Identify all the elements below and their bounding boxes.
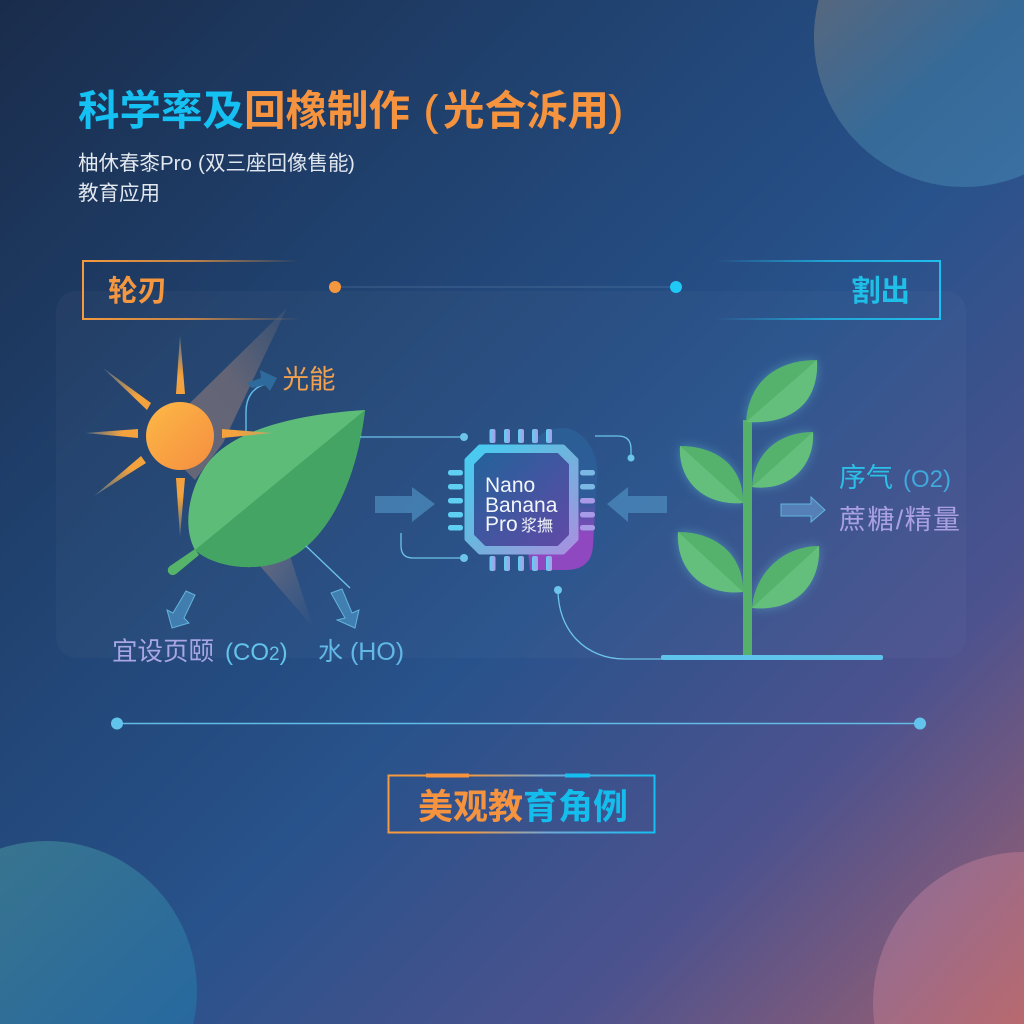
label: carbon dioxide: 宜设页颐 xyxy=(112,638,214,666)
light beam upper xyxy=(170,308,287,480)
arrow: carbon dioxide xyxy=(167,591,195,628)
icon: sun xyxy=(85,335,214,537)
circuit connectors xyxy=(360,433,662,659)
label: oxygen: 序气 xyxy=(839,463,893,493)
arrow: plant to outputs xyxy=(781,497,825,522)
central panel xyxy=(56,291,966,658)
divider line with end dots xyxy=(111,718,926,730)
ground line xyxy=(661,655,883,660)
caption text: 美观教育角例 xyxy=(418,788,628,827)
arrow: leaf to chip xyxy=(375,487,435,522)
title: 科学率及回橡制作 xyxy=(78,87,410,134)
chip label: Nano xyxy=(485,474,535,497)
decorative circle: bottom left xyxy=(0,841,197,1024)
label: oxygen: (O2) xyxy=(903,466,951,493)
input header box xyxy=(83,261,300,319)
input header label: 轮刃 xyxy=(108,275,167,308)
caption box xyxy=(388,774,654,832)
subtitle: ) xyxy=(348,152,355,175)
arrow: light energy xyxy=(246,370,277,432)
header connector xyxy=(329,281,682,293)
icon: large leaf xyxy=(168,410,365,575)
chip label: Pro xyxy=(485,513,518,536)
subtitle: 双三座回像售能 xyxy=(205,152,348,175)
label: water: 水 (HO) xyxy=(318,638,404,666)
icon: Nano Banana Pro chip xyxy=(448,428,597,571)
output header label: 割出 xyxy=(851,275,910,308)
title: 光合泝用 xyxy=(443,87,609,134)
subtitle xyxy=(78,152,355,205)
chip label: 浆撫 xyxy=(521,517,553,535)
chip label: Banana xyxy=(485,494,558,517)
label: sugar and energy: 蔗糖/精量 xyxy=(839,505,960,535)
title: ) xyxy=(609,87,623,134)
label: light energy: 光能 xyxy=(282,364,336,394)
arrow: water xyxy=(331,589,359,628)
decorative circle: top right xyxy=(814,0,1024,187)
arrow: plant to chip xyxy=(607,487,667,522)
title: ( xyxy=(424,87,438,134)
subtitle: 柚休春桼Pro xyxy=(78,152,192,175)
light beam lower xyxy=(260,556,313,627)
icon: plant xyxy=(678,360,819,656)
decorative circle: bottom right xyxy=(873,852,1024,1024)
output header box xyxy=(715,261,940,319)
sun ray over leaf xyxy=(222,429,272,438)
subtitle second line: 教育应用 xyxy=(78,182,160,205)
connector: leaf to water xyxy=(306,546,350,588)
subtitle: ( xyxy=(198,152,205,175)
label: carbon dioxide: (CO2) xyxy=(225,639,288,666)
chip label xyxy=(485,474,558,536)
